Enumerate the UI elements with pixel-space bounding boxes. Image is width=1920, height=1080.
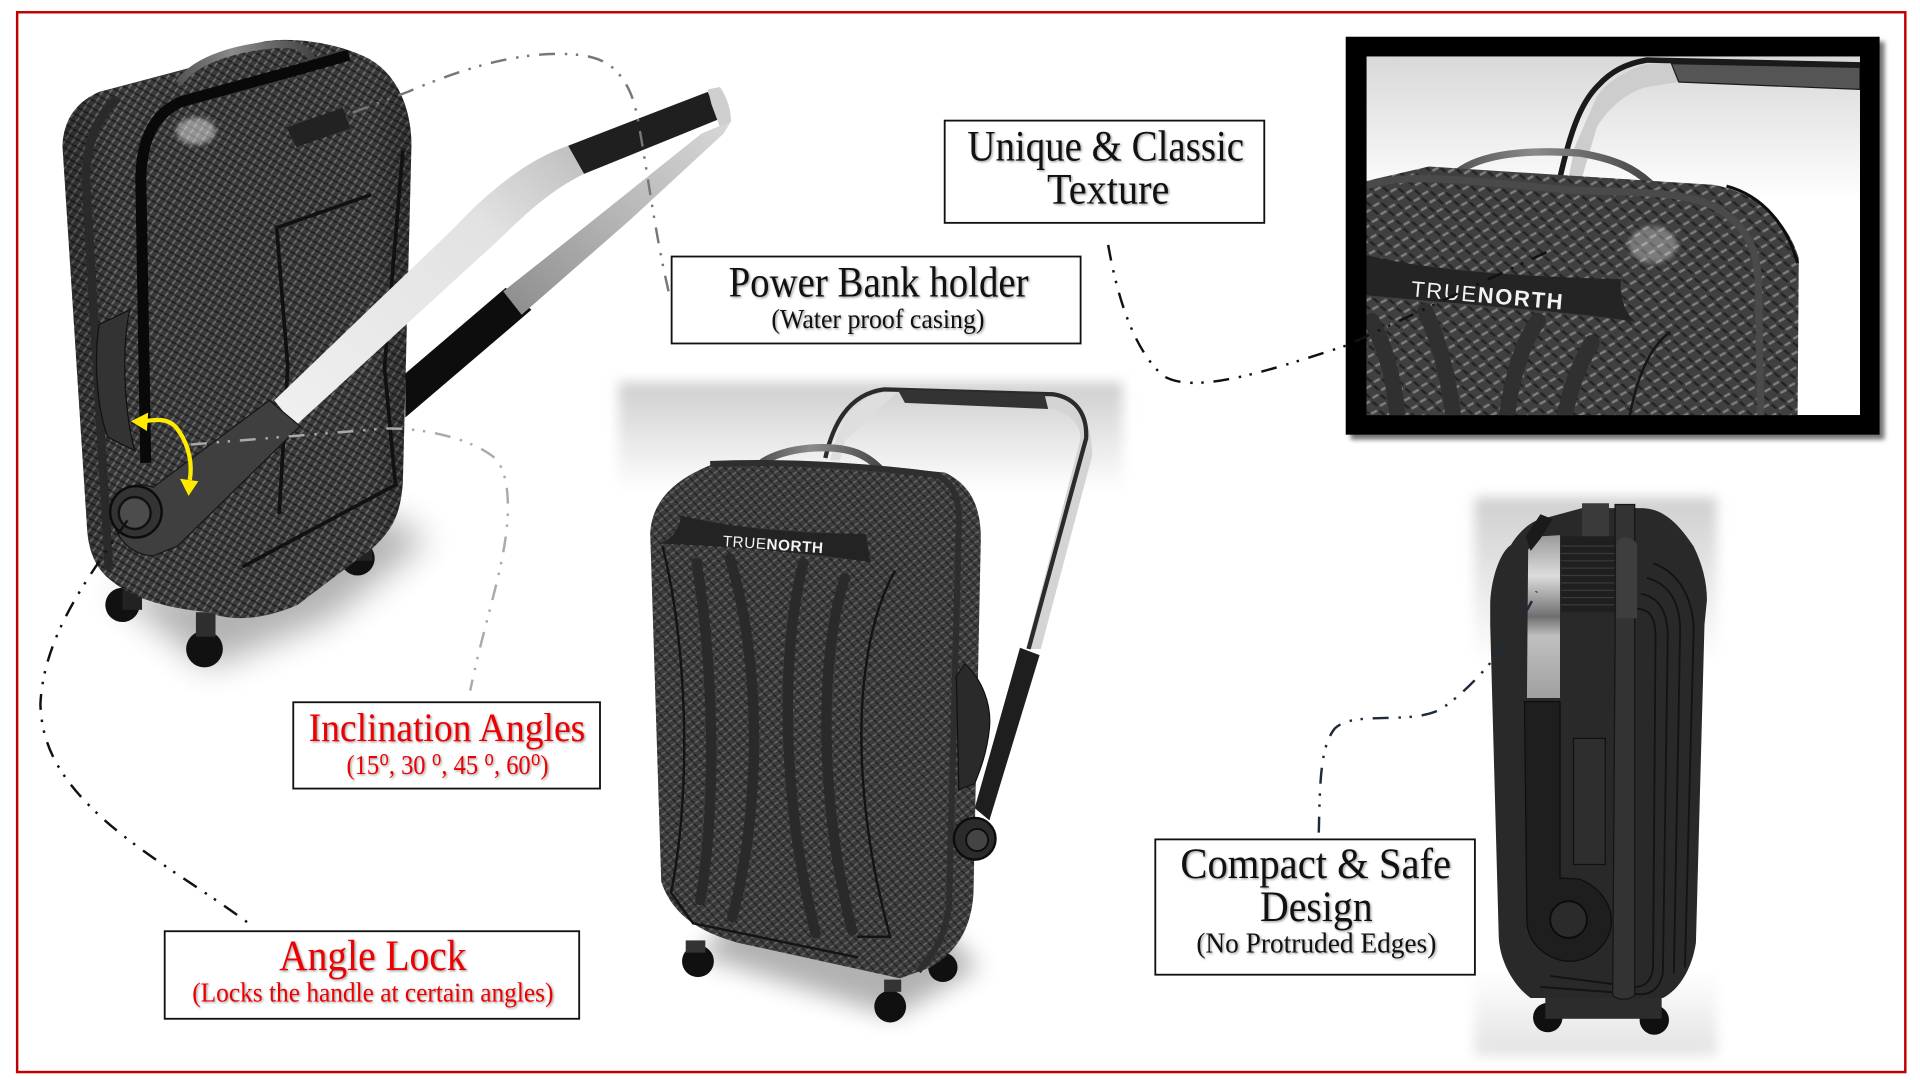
white front arm — [274, 146, 584, 426]
glare on corners — [176, 118, 216, 144]
wheels — [682, 940, 958, 1022]
arm bracket — [1526, 514, 1553, 551]
handle tip — [708, 87, 731, 127]
pivot knob — [1550, 901, 1587, 938]
logo text: TRUENORTH — [1410, 276, 1564, 315]
logo band — [659, 516, 871, 562]
power bank holder patch — [287, 108, 350, 147]
strap cap — [1616, 538, 1637, 618]
label: power bank holder: (Water proof casing) — [771, 304, 984, 334]
side seam band — [86, 98, 118, 569]
leader line: inclination angles — [191, 428, 508, 691]
logo band — [1365, 255, 1636, 322]
top carry handle — [179, 44, 312, 83]
leader line: compact design — [1319, 591, 1537, 833]
concentric grooves — [1540, 563, 1694, 994]
silver handle bend — [1569, 61, 1679, 178]
label: angle lock — [165, 931, 579, 1019]
handle grip — [1671, 64, 1860, 89]
carry handle — [1457, 152, 1651, 184]
front ribs — [1371, 311, 1592, 429]
pivot knob — [966, 829, 988, 851]
back telescopic arm black end — [405, 288, 531, 418]
handle slot — [1573, 738, 1605, 864]
body edge shading — [62, 40, 411, 618]
side grip — [956, 664, 990, 790]
handle grip — [568, 92, 720, 174]
lever arm — [1524, 702, 1611, 961]
photo: left suitcase with handle tilted — [62, 40, 731, 667]
glare — [1629, 227, 1678, 263]
label: angle lock: (Locks the handle at certain angles) — [192, 978, 553, 1008]
suitcase close-up body — [1365, 167, 1799, 422]
thin rib line — [1629, 332, 1670, 422]
floor shadow — [110, 514, 429, 667]
label: unique and classic texture: Texture — [1047, 166, 1169, 213]
side grip — [97, 310, 135, 451]
handle edge — [1560, 60, 1860, 178]
label: unique and classic texture — [945, 121, 1264, 223]
wheels — [105, 541, 375, 667]
label: compact and safe design: Design — [1260, 884, 1373, 931]
seam band — [1365, 179, 1761, 422]
label: inclination angles: (15⁰, 30 ⁰, 45 ⁰, 60⁰) — [347, 750, 549, 780]
logo text: TRUENORTH — [722, 533, 824, 557]
recessed panel lines — [242, 151, 403, 567]
top carry handle — [762, 448, 884, 473]
pivot disc — [954, 818, 996, 860]
seam band front — [141, 55, 349, 463]
rear seam — [1727, 186, 1798, 263]
thin panel lines — [662, 546, 895, 958]
silver arm — [1527, 535, 1560, 698]
photo: centre suitcase — [618, 382, 1123, 1022]
body — [1490, 508, 1707, 998]
label: inclination angles — [293, 702, 600, 789]
pivot disc — [110, 486, 162, 538]
leader line: power bank holder — [353, 54, 669, 291]
label: compact and safe design: (No Protruded Edges) — [1196, 929, 1436, 960]
backdrop — [1474, 497, 1717, 1056]
suitcase body — [62, 40, 411, 618]
label: angle lock: Angle Lock — [279, 933, 467, 980]
label: power bank holder: Power Bank holder — [729, 259, 1029, 306]
telescopic handle — [825, 389, 1092, 820]
close-up picture — [1365, 56, 1860, 429]
yellow double arrow — [131, 413, 198, 496]
right seam band — [710, 463, 959, 971]
floor shadow — [698, 918, 980, 1016]
label: power bank holder — [672, 257, 1081, 343]
label: compact and safe design: Compact & Safe — [1180, 841, 1451, 888]
lower silver arm — [503, 121, 731, 315]
black frame — [1346, 37, 1880, 435]
photo: texture close-up in black frame — [1346, 37, 1884, 440]
label: compact and safe design — [1155, 839, 1475, 975]
label: inclination angles: Inclination Angles — [309, 705, 585, 750]
leader line: angle lock — [40, 520, 253, 927]
wheels — [1533, 994, 1669, 1035]
ribbed collar — [1561, 536, 1615, 612]
front ribs — [697, 558, 852, 933]
photo: side-view suitcase — [1474, 497, 1717, 1056]
pivot knob — [119, 497, 151, 529]
label: unique and classic texture: Unique & Classic — [967, 123, 1244, 170]
leader line: texture — [1108, 245, 1549, 383]
lever arm — [112, 400, 300, 556]
vertical strap — [1613, 504, 1635, 999]
backdrop gradient — [618, 382, 1123, 492]
frame shadow — [1351, 42, 1884, 440]
top strap pieces — [1582, 503, 1609, 538]
suitcase body — [650, 461, 981, 978]
